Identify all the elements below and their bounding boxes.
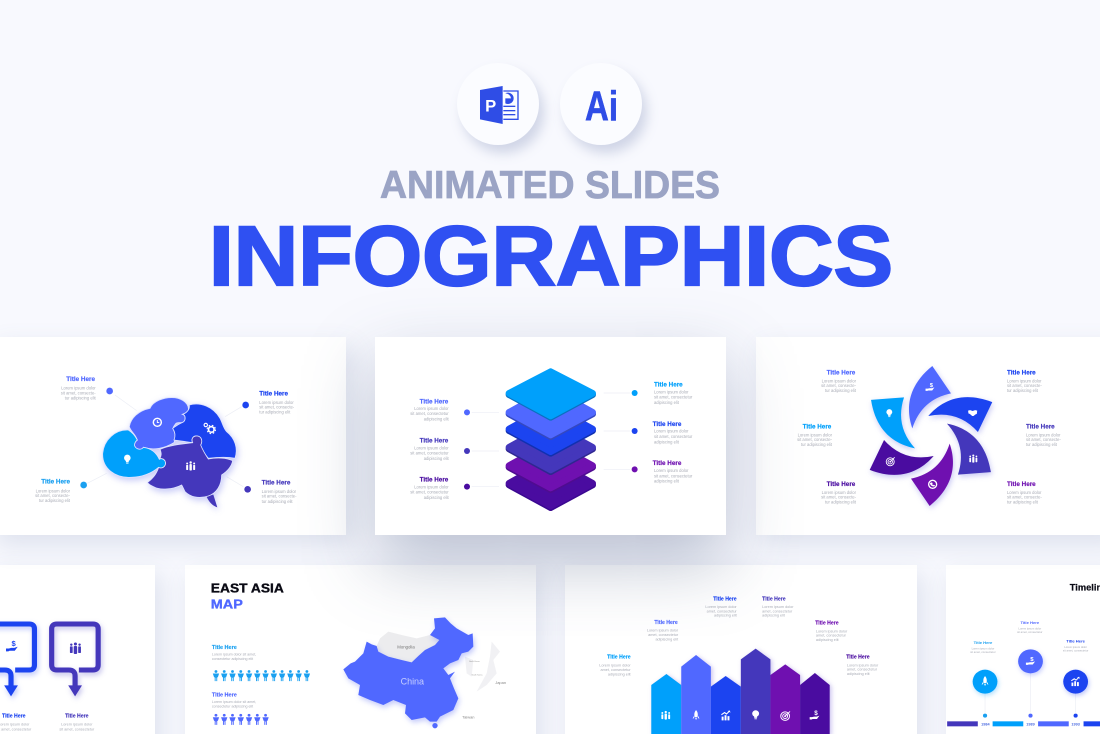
callout: layer left 1: adipiscing elit [424, 417, 450, 422]
callout: layer right 3: Lorem ipsum dolor [654, 468, 689, 473]
callout: brain bottom right: sit amet, consecte- [262, 494, 297, 499]
panel: layer stack slide [410, 372, 693, 508]
callout: frame title 2: Lorem ipsum dolor [61, 722, 93, 726]
callout: star bottom right: tur adipiscing elit [1007, 500, 1039, 505]
timeline node 2: Lorem ipsum dolor [1018, 627, 1041, 631]
callout: star top right: Lorem ipsum dolor [1007, 378, 1042, 383]
callout: star middle right: sit amet, consecte- [1026, 437, 1061, 442]
callout: column 6: adipiscing elit [847, 672, 870, 676]
callout: layer left 3 [410, 477, 470, 500]
callout: brain bottom left: sit amet, consecte- [35, 493, 71, 498]
timeline node 3: sit amet, consectetur [1063, 648, 1088, 652]
callout: brain top left: sit amet, consecte- [61, 390, 96, 395]
icon: Illustrator badge: Ai [585, 82, 618, 130]
callout: brain bottom left [35, 479, 87, 503]
callout: brain top right [242, 390, 295, 415]
text block: map title 2: consectetur adipiscing elit [212, 704, 253, 708]
callout: brain top left [61, 376, 113, 400]
timeline node 2: Title Here [1020, 620, 1040, 625]
map: east asia: North Korea [469, 660, 481, 663]
callout: brain top left: Title Here [66, 376, 95, 383]
callout: star top right: sit amet, consecte- [1007, 383, 1042, 388]
callout: brain bottom right: Title Here [262, 480, 291, 487]
callout: layer right 2: sit amet, consectetur [654, 434, 693, 439]
callout: brain bottom left: Lorem ipsum dolor [36, 488, 71, 493]
callout: star bottom left: Title Here [827, 481, 856, 488]
callout: column 1: Lorem ipsum dolor [599, 664, 631, 668]
callout: layer left 1: Lorem ipsum dolor [414, 406, 449, 411]
slide card: brain [0, 337, 346, 535]
callout: layer right 3: Title Here [653, 460, 682, 467]
panel: star slide [797, 366, 1061, 506]
slide card: arrow chart [565, 565, 917, 734]
map: east asia: Taiwan [462, 714, 475, 719]
icon: blue hand with dollar: $ [11, 639, 17, 648]
text block: map title 1 [212, 645, 256, 661]
callout: star bottom right: sit amet, consecte- [1007, 495, 1042, 500]
callout: brain top right: Title Here [259, 390, 289, 397]
callout: column 5 [815, 621, 848, 642]
slide card: east asia map [185, 565, 536, 734]
callout: layer left 2: Lorem ipsum dolor [414, 445, 449, 450]
text block: map title 2: Lorem ipsum dolor sit amet, [212, 700, 256, 704]
callout: column 4 [762, 596, 794, 618]
callout: layer left 3: Lorem ipsum dolor [414, 484, 449, 489]
callout: column 6: Title Here [846, 654, 870, 660]
callout: star top left: sit amet, consecte- [821, 383, 857, 388]
text block: map title 2 [212, 693, 256, 708]
icon: purple speech frame [52, 624, 98, 696]
timeline node 2 [1017, 620, 1043, 718]
callout: star bottom right: Title Here [1007, 481, 1036, 488]
map: east asia: Japan [495, 680, 506, 685]
timeline node 3: Title Here [1066, 639, 1086, 644]
callout: layer left 2: adipiscing elit [424, 456, 450, 461]
timeline node 3: Lorem ipsum dolor [1064, 645, 1087, 649]
callout: column 3: adipiscing elit [714, 614, 737, 618]
callout: layer right 1 [632, 382, 693, 405]
callout: star bottom left: sit amet, consecte- [821, 495, 857, 500]
icon: blue speech frame [0, 624, 34, 696]
heading: east asia map [211, 581, 284, 612]
timeline node 1 [970, 640, 997, 718]
callout: brain bottom left: tur adipiscing elit [39, 498, 71, 503]
callout: column 4: amet, consectetur [762, 609, 793, 613]
callout: star middle left: Title Here [803, 423, 832, 430]
callout: star middle left: tur adipiscing elit [801, 442, 833, 447]
callout: column 4: adipiscing elit [762, 614, 785, 618]
callout: layer left 2: sit amet, consectetur [410, 451, 449, 456]
title: INFOGRAPHICS [209, 209, 893, 303]
callout: star middle right: Title Here [1026, 423, 1055, 430]
callout: star top right: tur adipiscing elit [1007, 388, 1039, 393]
timeline: bars [947, 721, 1100, 726]
slide card: timeline [946, 565, 1100, 734]
icon: Illustrator badge [560, 63, 647, 153]
callout: frame title 2: sit amet, consectetur [59, 727, 95, 731]
slide card: star [756, 337, 1100, 535]
subtitle: ANIMATED SLIDES [380, 164, 720, 207]
timeline node 1: sit amet, consectetur [970, 650, 996, 654]
star graphic [859, 366, 1003, 506]
callout: layer right 2: Lorem ipsum dolor [654, 429, 689, 434]
callout: star top left: tur adipiscing elit [825, 388, 857, 393]
panel: speech frames and map slides [0, 581, 310, 731]
callout: brain bottom left: Title Here [41, 479, 70, 486]
callout: star top left: Lorem ipsum dolor [822, 378, 857, 383]
timeline: year labels: 1984 [981, 722, 991, 726]
callout: layer left 3: sit amet, consectetur [410, 490, 449, 495]
callout: layer left 1 [410, 398, 470, 422]
map: east asia: Mongolia [397, 644, 415, 649]
callout: column 3: Title Here [713, 596, 737, 602]
callout: layer right 2 [632, 421, 693, 444]
callout: star top left: Title Here [827, 369, 856, 376]
panel: brain slide [35, 376, 297, 504]
callout: layer right 2: adipiscing elit [654, 439, 680, 444]
callout: column 5: Lorem ipsum dolor [816, 629, 848, 633]
callout: layer left 3: adipiscing elit [424, 495, 450, 500]
callout: frame title 1: Title Here [2, 713, 26, 719]
slide card: lower left partial [0, 565, 155, 734]
timeline: year labels: 1993 [1071, 722, 1080, 726]
chart: arrow columns [651, 649, 830, 734]
callout: layer right 3 [632, 460, 693, 484]
heading: east asia map: EAST ASIA [211, 581, 284, 596]
heading: east asia map: MAP [211, 597, 243, 612]
callout: column 6 [846, 654, 879, 676]
callout: brain bottom right: Lorem ipsum dolor [262, 489, 297, 494]
callout: brain top right: sit amet, consecte- [259, 405, 295, 410]
timeline: year labels [981, 722, 1080, 726]
callout: column 1: amet, consectetur [601, 668, 631, 672]
callout: star bottom left [821, 481, 857, 505]
stacked diamonds [509, 372, 593, 508]
callout: layer right 1: adipiscing elit [654, 400, 680, 405]
timeline node 1: Lorem ipsum dolor [972, 647, 994, 651]
timeline node 1: Title Here [974, 640, 993, 645]
timeline node 2: sit amet, consectetur [1017, 630, 1043, 634]
callout: frame title 1 [0, 713, 32, 731]
callout: layer right 2: Title Here [653, 421, 682, 428]
timeline: year labels: 1989 [1026, 722, 1035, 726]
timeline node 3 [1063, 639, 1088, 718]
callout: layer left 1: Title Here [420, 398, 449, 405]
map: east asia [343, 617, 506, 728]
callout: layer left 3: Title Here [420, 477, 449, 484]
callout: star top right [1007, 369, 1042, 393]
callout: layer right 3: sit amet, consectetur [654, 473, 693, 478]
callout: star bottom left: Lorem ipsum dolor [822, 490, 857, 495]
callout: star bottom right: Lorem ipsum dolor [1007, 490, 1042, 495]
callout: column 6: Lorem ipsum dolor [847, 663, 879, 667]
callout: column 6: amet, consectetur [847, 668, 878, 672]
text block: map title 1: consectetur adipiscing elit [212, 657, 253, 661]
callout: brain top right: tur adipiscing elit [259, 410, 291, 415]
brain graphic [103, 398, 236, 507]
slide card: layer stack [375, 337, 726, 535]
map: east asia: China [401, 677, 424, 687]
callout: star middle left: sit amet, consecte- [797, 437, 833, 442]
callout: column 2: Lorem ipsum dolor [647, 629, 679, 633]
map: east asia: South Korea [471, 673, 483, 676]
callout: star bottom right [1007, 481, 1042, 505]
callout: frame title 2 [59, 713, 95, 731]
callout: frame title 2: Title Here [65, 713, 89, 719]
pictogram row: light blue people [213, 670, 310, 681]
icon: blue hand with dollar [6, 639, 18, 651]
icon: PowerPoint badge [457, 63, 544, 153]
callout: column 5: adipiscing elit [816, 638, 839, 642]
callout: column 4: Lorem ipsum dolor [762, 605, 794, 609]
icon: PowerPoint badge: P [485, 96, 496, 115]
callout: brain bottom right [244, 480, 297, 504]
text block: map title 2: Title Here [212, 693, 237, 699]
callout: star bottom left: tur adipiscing elit [825, 500, 857, 505]
callout: column 1: Title Here [607, 655, 631, 661]
callout: column 2 [647, 620, 679, 641]
callout: layer left 2 [410, 438, 470, 461]
callout: brain bottom right: tur adipiscing elit [262, 499, 293, 504]
callout: column 3 [705, 596, 737, 618]
callout: layer right 1: Lorem ipsum dolor [654, 390, 689, 395]
callout: brain top right: Lorem ipsum dolor [259, 400, 294, 405]
text block: map title 1: Title Here [212, 645, 237, 651]
callout: star middle left: Lorem ipsum dolor [798, 432, 833, 437]
callout: column 3: amet, consectetur [707, 609, 737, 613]
text block: map title 1: Lorem ipsum dolor sit amet, [212, 653, 256, 657]
callout: star middle left [797, 423, 833, 447]
callout: column 3: Lorem ipsum dolor [705, 605, 737, 609]
panel: arrow chart and timeline slides [599, 583, 1100, 734]
callout: column 5: amet, consectetur [816, 634, 847, 638]
callout: column 1: adipiscing elit [608, 672, 631, 676]
callout: layer right 1: sit amet, consectetur [654, 395, 693, 400]
callout: layer right 3: adipiscing elit [654, 479, 680, 484]
callout: star middle right: tur adipiscing elit [1026, 442, 1058, 447]
callout: star top left [821, 369, 857, 393]
callout: star middle right [1026, 423, 1061, 447]
pictogram row: blue people [213, 714, 269, 725]
callout: column 4: Title Here [762, 596, 786, 602]
callout: layer right 1: Title Here [654, 382, 683, 389]
callout: brain top left: tur adipiscing elit [65, 395, 96, 400]
callout: column 5: Title Here [815, 621, 839, 627]
callout: star middle right: Lorem ipsum dolor [1026, 432, 1061, 437]
icon: people [70, 642, 81, 654]
callout: layer left 1: sit amet, consectetur [410, 411, 449, 416]
callout: column 2: adipiscing elit [655, 637, 678, 641]
callout: column 2: Title Here [654, 620, 678, 626]
callout: column 1 [599, 655, 631, 676]
callout: column 2: amet, consectetur [648, 633, 679, 637]
callout: star top right: Title Here [1007, 369, 1036, 376]
callout: brain top left: Lorem ipsum dolor [61, 386, 96, 391]
callout: layer left 2: Title Here [420, 438, 449, 445]
